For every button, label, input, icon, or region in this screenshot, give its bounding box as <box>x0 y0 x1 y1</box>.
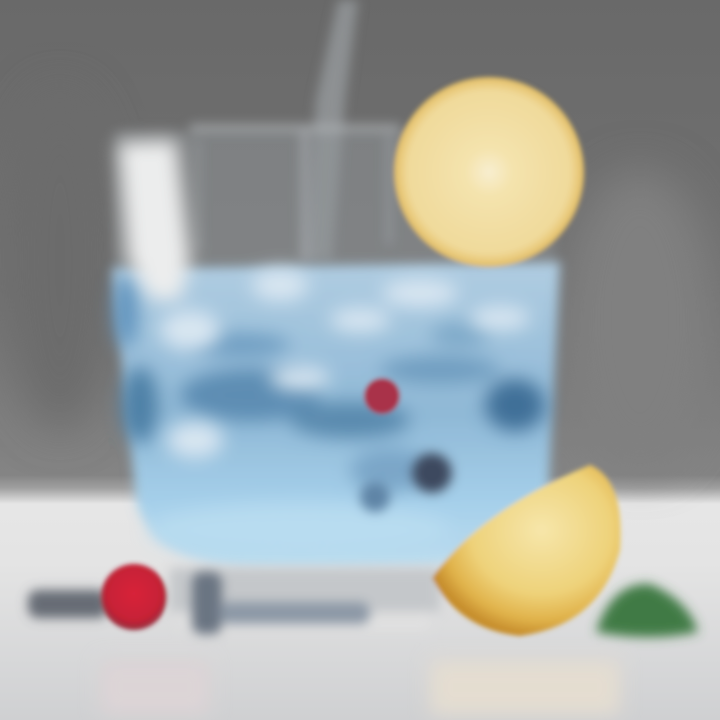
white straw <box>118 140 190 300</box>
raspberry <box>101 564 167 630</box>
leaf <box>596 584 698 637</box>
water stream <box>306 0 358 260</box>
red berry in water <box>364 378 400 414</box>
dark blueberry in water <box>412 453 452 493</box>
table reflections <box>100 660 620 715</box>
lemon half <box>432 465 621 636</box>
bright lower water <box>150 504 450 556</box>
dark blue water swirls <box>114 272 545 492</box>
small blue berry in water <box>360 482 390 512</box>
wall shading <box>5 90 715 470</box>
lemon slice <box>394 77 584 267</box>
empty upper glass <box>115 124 555 267</box>
dark stem on table <box>28 572 370 634</box>
light water highlights <box>160 269 530 458</box>
water in glass <box>112 262 560 566</box>
glass base <box>170 568 440 630</box>
